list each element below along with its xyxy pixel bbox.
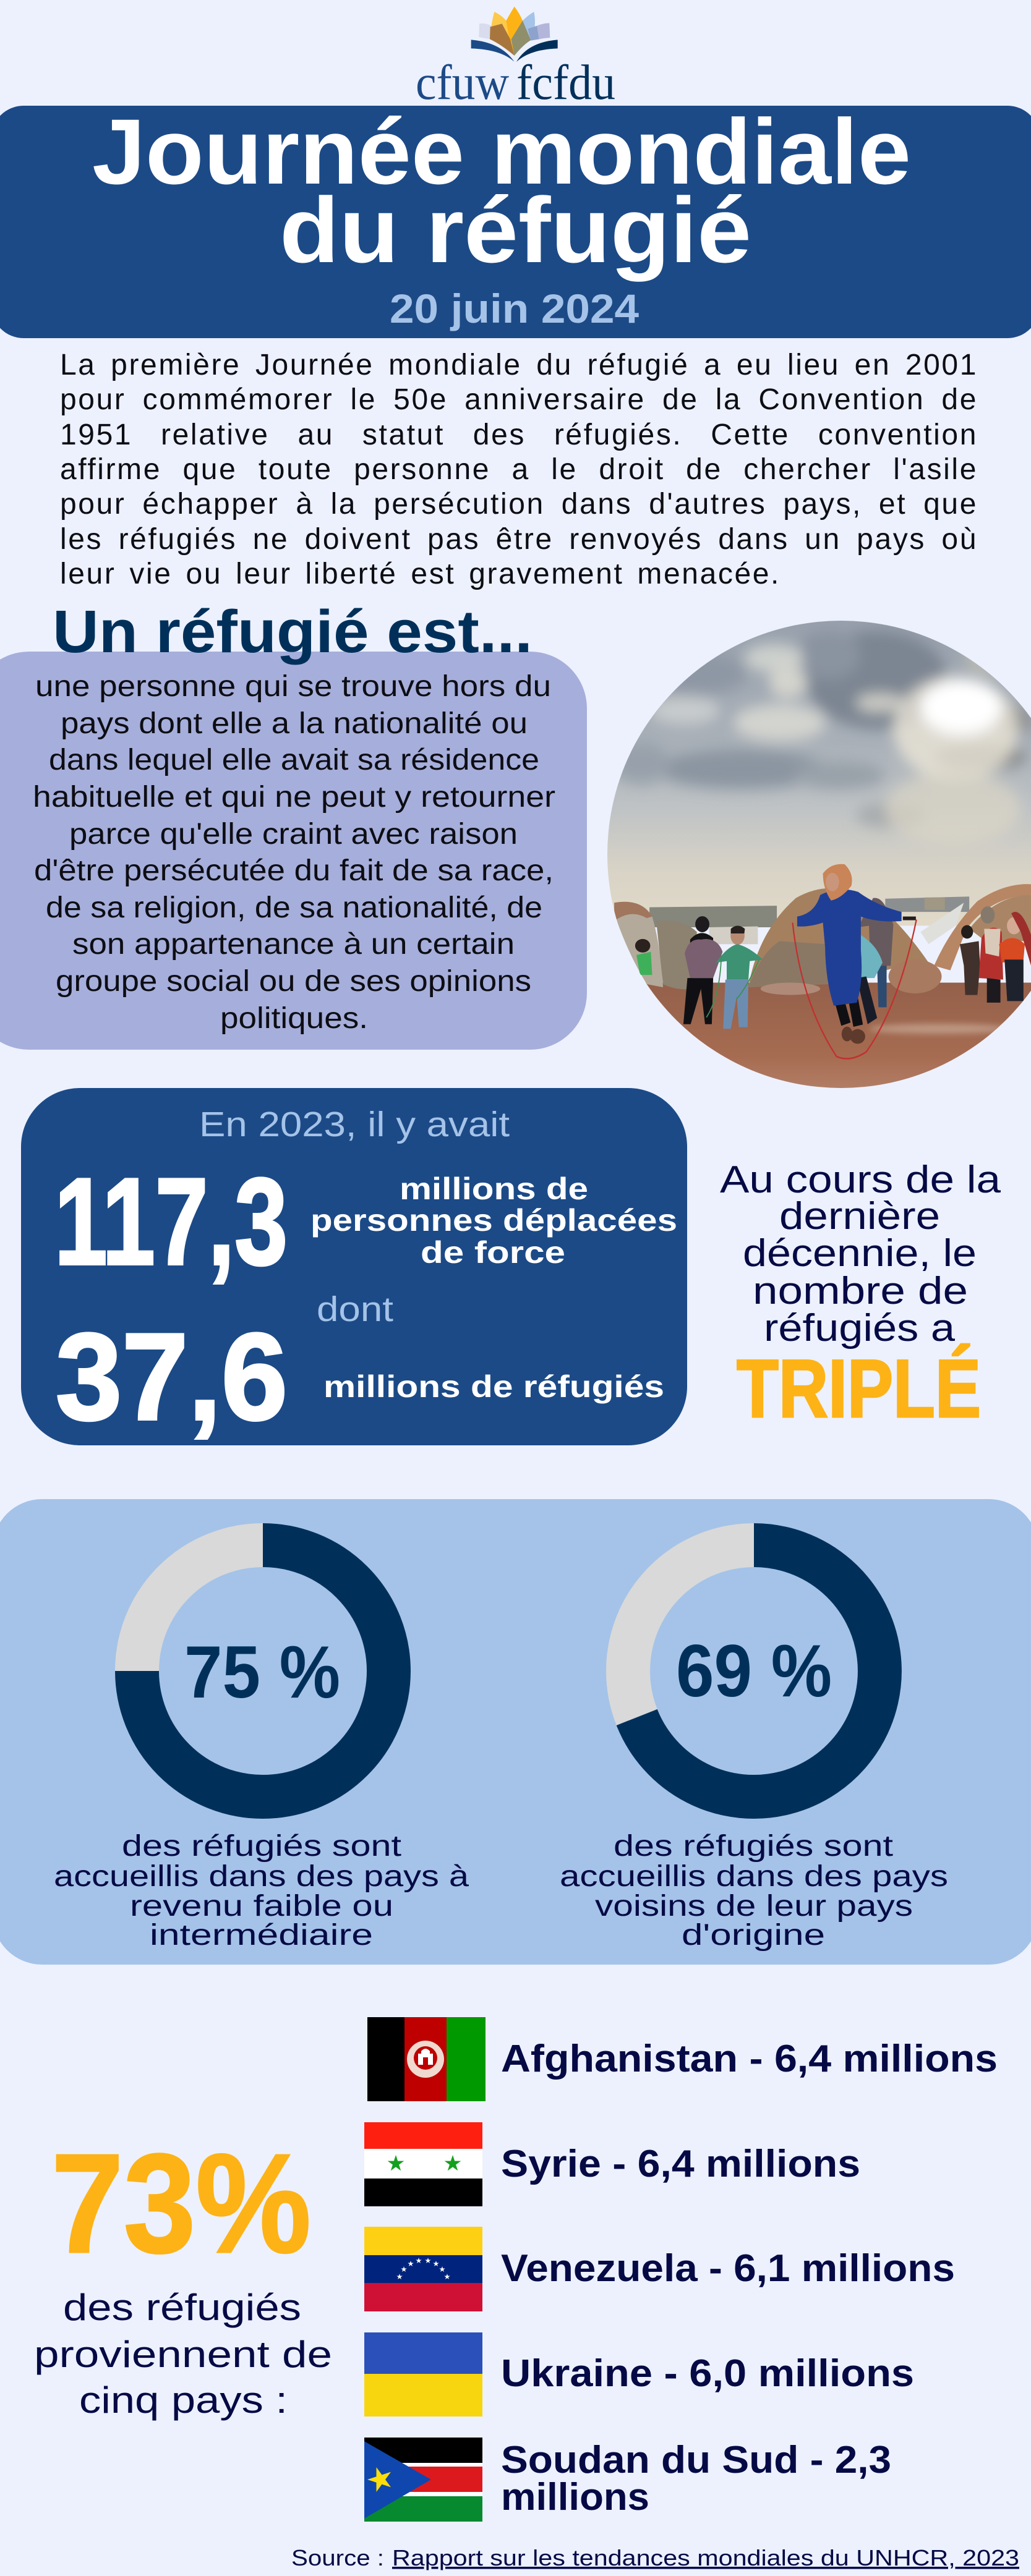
definition text: son appartenance à un certain [72, 928, 515, 961]
callout: tripled: Au cours de la [720, 1158, 1001, 1201]
definition text: habituelle et qui ne peut y retourner [33, 781, 555, 814]
right group [961, 925, 973, 938]
stat label: displaced people [310, 1171, 677, 1270]
kid in green [730, 933, 745, 945]
text: five countries [34, 2287, 332, 2421]
text: affirme que toute personne a le droit de chercher l'asile [60, 453, 978, 486]
callout: tripled: dernière [779, 1195, 940, 1238]
donut chart: 75 % [137, 1545, 388, 1796]
photo: children skipping rope in a refugee camp [606, 618, 1031, 1106]
title: du réfugié [280, 178, 751, 282]
flag: Afghanistan [367, 2017, 486, 2101]
source: Source : [291, 2545, 384, 2570]
definition text: parce qu'elle craint avec raison [69, 818, 518, 851]
stat: 117,3: 117,3 [54, 1153, 288, 1291]
caption: 69 %: accueillis dans des pays [560, 1860, 948, 1893]
caption: 69 %: d'origine [682, 1919, 825, 1952]
donut chart: 69 %: 69 % [676, 1630, 832, 1712]
caption: 75 %: intermédiaire [150, 1919, 373, 1952]
kid in dark hood [695, 916, 709, 932]
flag: Syria [364, 2122, 482, 2206]
title banner [0, 100, 1031, 338]
caption: 69 %: des réfugiés sont [614, 1830, 893, 1863]
text: five countries: proviennent de [34, 2334, 332, 2375]
stat: 73%: 73% [51, 2125, 311, 2282]
logo: cfuw fcfdu: cfuw [416, 56, 509, 110]
stat label: displaced people: de force [421, 1235, 565, 1270]
definition text: une personne qui se trouve hors du [35, 670, 551, 703]
stat: 37,6: 37,6 [56, 1308, 288, 1446]
callout: tripled: réfugiés a [764, 1307, 956, 1350]
stat label: displaced people: millions de [400, 1171, 588, 1206]
callout: tripled [720, 1158, 1001, 1435]
label: South Sudan: millions [501, 2476, 649, 2519]
donut chart: 75 %: 75 % [184, 1631, 340, 1714]
caption: 69 %: voisins de leur pays [595, 1890, 913, 1923]
heading: Un réfugié est: Un réfugié est... [53, 598, 533, 665]
intro paragraph [60, 349, 978, 590]
flag: Venezuela [364, 2227, 482, 2311]
text: leur vie ou leur liberté est gravement menacée. [60, 558, 781, 590]
title: Journée mondiale [92, 100, 911, 203]
label: South Sudan [501, 2439, 891, 2519]
definition text: pays dont elle a la nationalité ou [61, 707, 528, 740]
callout: tripled: décennie, le [743, 1232, 977, 1275]
definition text: de sa religion, de sa nationalité, de [46, 891, 542, 924]
definition text [33, 670, 555, 1035]
stat label: displaced people: personnes déplacées [310, 1203, 677, 1238]
source: Rapport sur les tendances mondiales du UNHCR, 2023 [392, 2545, 1019, 2570]
girl skipping rope [839, 1000, 858, 1026]
definition text: dans lequel elle avait sa résidence [49, 744, 539, 776]
caption: 75 %: des réfugiés sont [122, 1830, 401, 1863]
callout: tripled: TRIPLÉ [737, 1343, 981, 1435]
caption: 69 % [560, 1830, 948, 1952]
text: les réfugiés ne doivent pas être renvoyés dans un pays où [60, 523, 978, 556]
label: Syria: Syrie - 6,4 millions [501, 2143, 860, 2185]
text: five countries: cinq pays : [79, 2379, 288, 2421]
flag: Ukraine [364, 2332, 482, 2417]
caption: 75 %: accueillis dans des pays à [54, 1860, 469, 1893]
stat intro: En 2023, il y avait [199, 1105, 510, 1144]
callout: tripled: nombre de [753, 1270, 968, 1312]
label: Afghanistan: Afghanistan - 6,4 millions [501, 2038, 998, 2080]
panel: donut charts [0, 1499, 1031, 1965]
plaid kid and blue kid behind [858, 898, 893, 966]
label: South Sudan: Soudan du Sud - 2,3 [501, 2439, 891, 2481]
stat label: refugees: millions de réfugiés [323, 1369, 664, 1404]
connector word: dont [317, 1290, 393, 1329]
text: La première Journée mondiale du réfugié a eu lieu en 2001 [60, 349, 978, 381]
title [92, 100, 911, 282]
text: five countries: des réfugiés [63, 2287, 301, 2328]
text: pour échapper à la persécution dans d'autres pays, et que [60, 488, 978, 521]
logo: cfuw fcfdu: fcfdu [516, 56, 615, 110]
text: 1951 relative au statut des réfugiés. Cette convention [60, 419, 978, 451]
left small kid [635, 939, 650, 953]
label: Venezuela: Venezuela - 6,1 millions [501, 2247, 955, 2290]
date: 20 juin 2024 [390, 286, 639, 331]
logo: cfuw fcfdu [416, 7, 615, 110]
definition text: d'être persécutée du fait de sa race, [34, 854, 554, 887]
flag: South Sudan [364, 2438, 482, 2522]
panel: displaced people statistics [21, 1088, 687, 1446]
caption: 75 %: revenu faible ou [130, 1890, 393, 1923]
caption: 75 % [54, 1830, 469, 1952]
panel: definition [0, 652, 587, 1050]
definition text: politiques. [220, 1002, 368, 1035]
label: Ukraine: Ukraine - 6,0 millions [501, 2352, 914, 2395]
definition text: groupe social ou de ses opinions [56, 965, 531, 998]
donut chart: 69 % [628, 1545, 879, 1796]
text: pour commémorer le 50e anniversaire de la Convention de [60, 383, 978, 416]
